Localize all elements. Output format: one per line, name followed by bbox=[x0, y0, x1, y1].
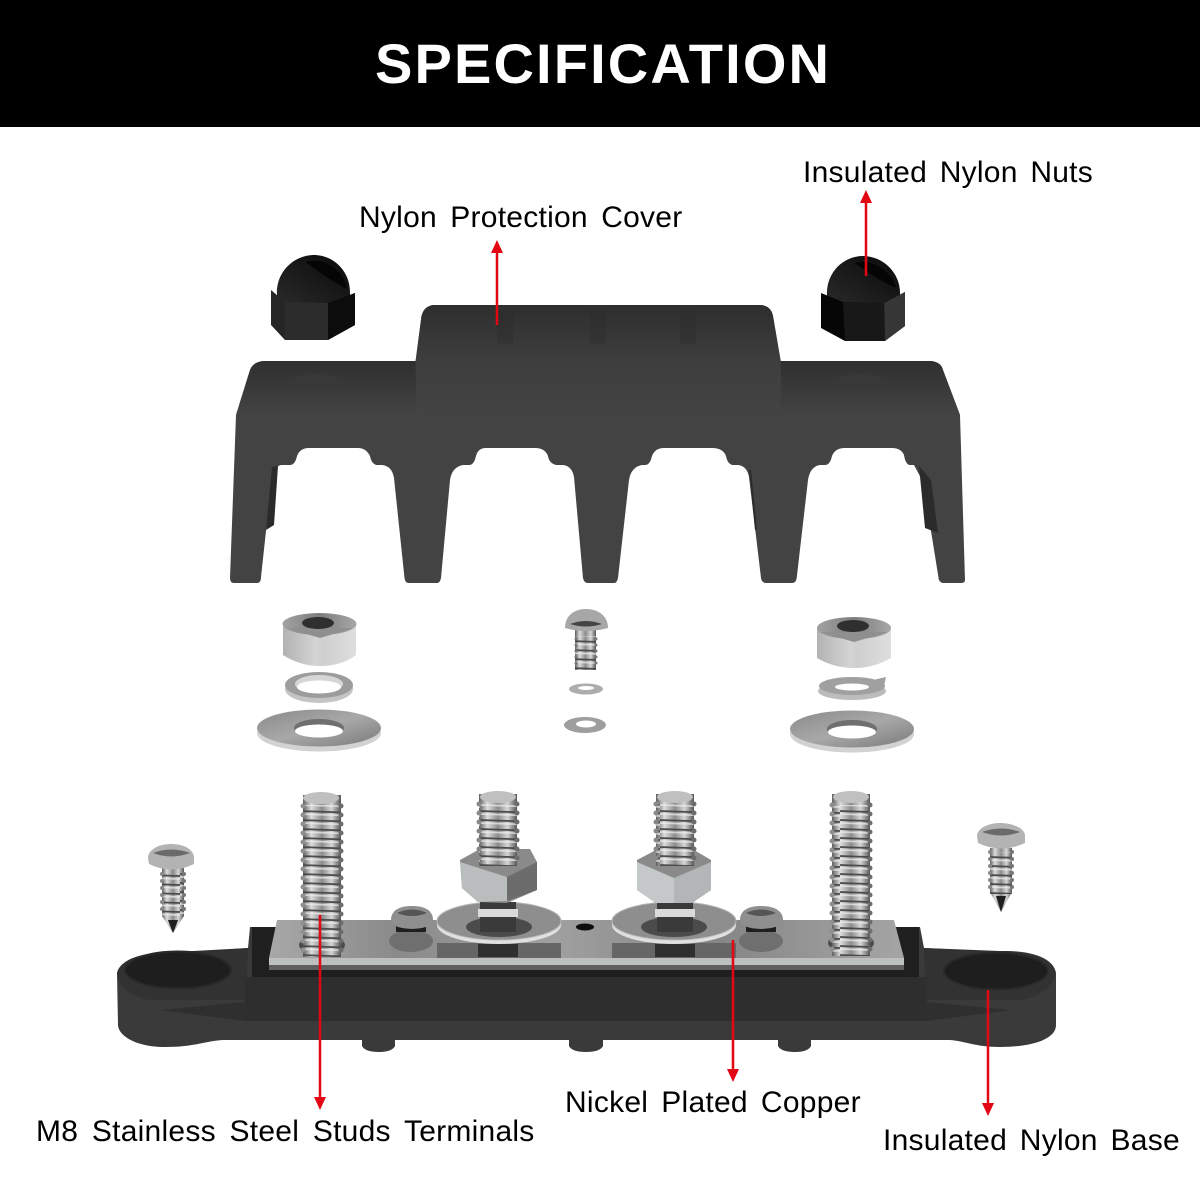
header banner bbox=[0, 0, 1200, 127]
arrow: studs bbox=[314, 915, 326, 1110]
label: studs terminals: M8 Stainless Steel Studs Terminals bbox=[36, 1115, 535, 1148]
lower stud bbox=[478, 944, 518, 957]
small centre screw bbox=[565, 609, 608, 670]
small spring washer bbox=[569, 684, 603, 694]
lower stud bbox=[655, 944, 695, 957]
hex nut right bbox=[817, 617, 891, 668]
spring washer right bbox=[818, 677, 886, 700]
stud assembly centre left bbox=[437, 791, 561, 957]
arrow: base bbox=[982, 990, 994, 1116]
cover leg inner side right bbox=[919, 466, 938, 533]
label: nickel plated copper: Nickel Plated Copper bbox=[565, 1086, 861, 1119]
tall stud left bbox=[299, 792, 345, 957]
mounting screw left bbox=[148, 844, 194, 933]
base ledge bbox=[252, 927, 919, 977]
lobe top surface right bbox=[924, 948, 1056, 1000]
cover screw recess right bbox=[830, 374, 890, 388]
label: nylon protection cover: Nylon Protection Cover bbox=[359, 201, 682, 234]
nickel plated copper busbar bbox=[269, 920, 904, 970]
arrow: copper bbox=[727, 940, 739, 1082]
insulated nylon base bbox=[117, 927, 1056, 1052]
flat washer left bbox=[257, 710, 381, 752]
cover leg inner side centre bbox=[749, 470, 757, 530]
plate shadow under washers bbox=[437, 943, 736, 958]
label: insulated nylon base: Insulated Nylon Base bbox=[883, 1124, 1180, 1157]
small flat washer bbox=[564, 717, 606, 733]
lobe top surface left bbox=[117, 948, 248, 1000]
cover shoulder right bbox=[780, 361, 960, 415]
arrow: nylon nuts bbox=[860, 190, 872, 276]
hex nut left bbox=[282, 613, 356, 666]
plate screw right bbox=[739, 906, 783, 952]
plate screw left bbox=[389, 906, 433, 952]
flange washer bbox=[437, 902, 561, 944]
base wedge right bbox=[927, 1002, 1012, 1021]
cover ribs bbox=[497, 310, 696, 344]
cover shoulder left bbox=[236, 361, 416, 415]
base wedge left bbox=[160, 1002, 245, 1021]
hex nut bbox=[460, 849, 537, 903]
cover screw recess left bbox=[287, 374, 347, 388]
arrow: protection cover bbox=[491, 240, 503, 325]
hex nut bbox=[637, 850, 711, 903]
base front band bbox=[245, 977, 927, 1021]
stud assembly centre right bbox=[612, 791, 736, 957]
mounting hole left bbox=[125, 952, 231, 988]
insulated nylon nut right bbox=[821, 256, 905, 341]
tall stud right bbox=[828, 791, 874, 956]
stud thread bbox=[656, 794, 694, 866]
spring washer left bbox=[285, 672, 353, 703]
cover raised centre bbox=[416, 305, 781, 418]
cover leg inner side left bbox=[266, 466, 278, 530]
mounting screw right bbox=[977, 823, 1025, 912]
label: insulated nylon nuts: Insulated Nylon Nuts bbox=[803, 156, 1093, 189]
busbar hole bbox=[576, 924, 594, 930]
flat washer right bbox=[790, 710, 914, 752]
title: SPECIFICATION bbox=[375, 32, 829, 95]
flange washer bbox=[612, 902, 736, 944]
stud thread bbox=[479, 794, 517, 866]
nylon protection cover bbox=[230, 305, 965, 583]
insulated nylon nut left bbox=[271, 255, 355, 340]
base pegs bbox=[362, 1040, 811, 1052]
mounting hole right bbox=[944, 952, 1048, 990]
